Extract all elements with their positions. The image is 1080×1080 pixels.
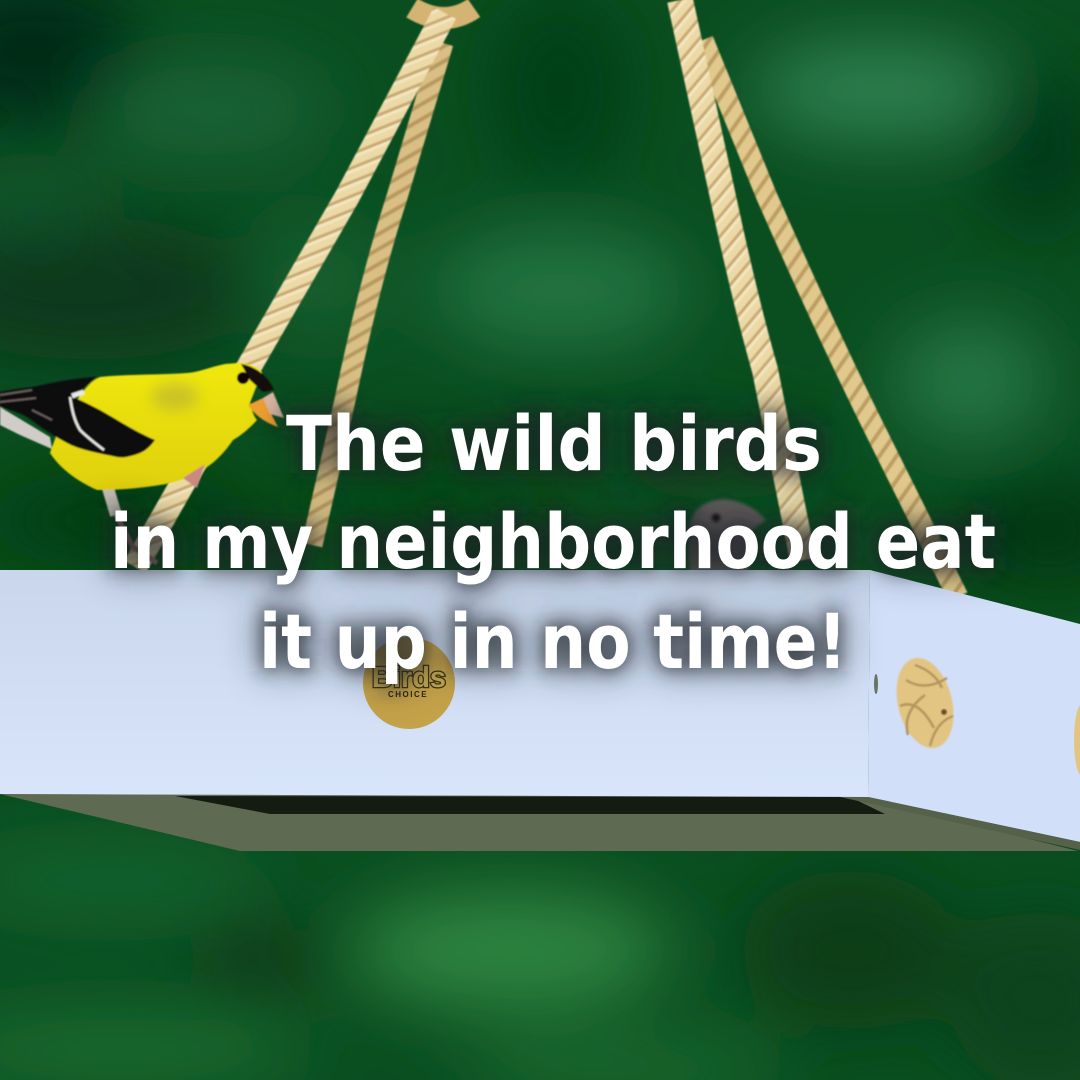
rope: front right	[680, 0, 803, 560]
foot	[183, 464, 205, 488]
tail underside	[0, 407, 52, 449]
rope: back left	[312, 43, 443, 545]
caption	[110, 399, 996, 686]
caption wide shadow: it up in no time!	[259, 597, 847, 686]
olive back patch	[151, 383, 199, 411]
badge: Birds	[372, 662, 446, 694]
caption tight shadow: The wild birds	[286, 399, 822, 488]
rope: top knot	[412, 8, 474, 18]
badge: CHOICE	[388, 690, 428, 699]
tray hole	[874, 674, 878, 694]
body	[50, 363, 262, 490]
caption tight shadow	[110, 399, 996, 686]
rope: front left	[135, 13, 445, 567]
black cap	[241, 364, 274, 392]
caption line 3: it up in no time!	[259, 597, 847, 686]
tray front face	[0, 570, 870, 797]
sparrow head behind tray	[688, 499, 766, 575]
caption wide shadow	[110, 399, 996, 686]
eye	[237, 372, 249, 384]
white wing stripe	[70, 397, 104, 450]
caption wide shadow: The wild birds	[286, 399, 822, 488]
bird leg	[108, 488, 116, 515]
tray underside	[0, 794, 1078, 851]
badge	[363, 637, 455, 729]
caption tight shadow: it up in no time!	[259, 597, 847, 686]
rope: back right	[703, 40, 958, 597]
rope knot: far edge	[1074, 704, 1080, 776]
wing feather streaks	[0, 390, 52, 420]
ropes	[135, 0, 958, 597]
goldfinch	[0, 363, 284, 563]
beak	[248, 398, 278, 427]
tray right face	[868, 570, 1080, 842]
caption line 1: The wild birds	[286, 399, 822, 488]
rope knot: near	[888, 652, 962, 754]
feeder tray	[0, 570, 1080, 851]
wing	[0, 377, 155, 457]
